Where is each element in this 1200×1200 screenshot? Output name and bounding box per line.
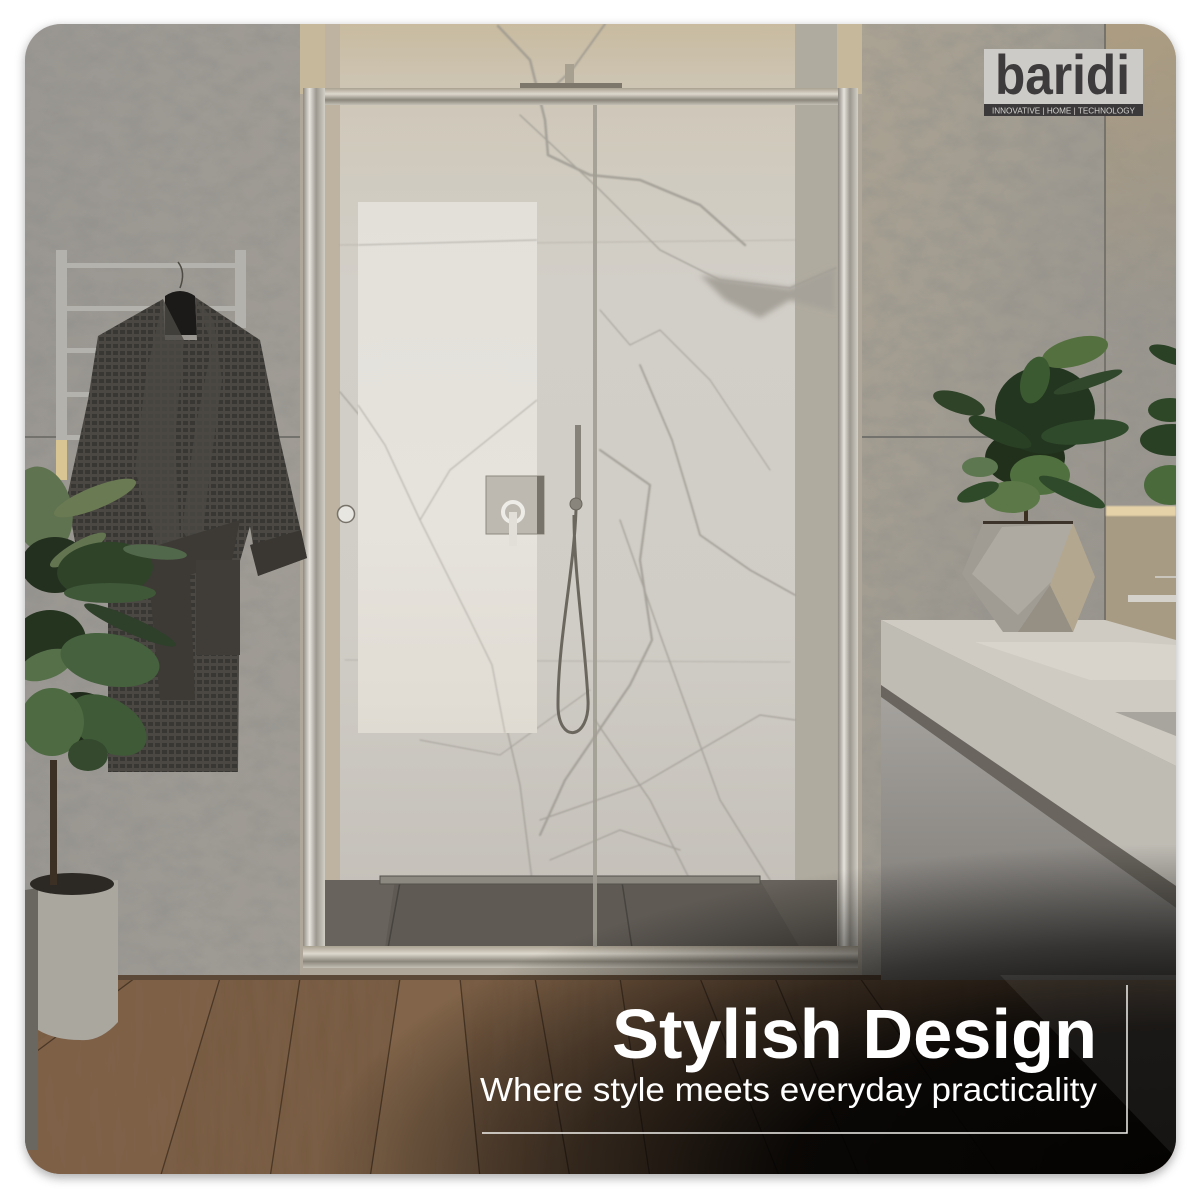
towel rail [56,250,246,480]
shower head [520,64,622,90]
vanity shadow groove [881,685,1176,908]
right plant [930,330,1130,525]
frosted glass reflection [358,202,537,733]
reflection strip at right mirror [1106,506,1176,640]
corner rule around caption [482,985,1127,1133]
wood floor [25,975,1176,1178]
mixer valve plate [486,476,544,534]
vanity cabinet [881,697,1176,980]
left plant [25,466,187,885]
dark gradient overlay [348,852,1176,1174]
subtitle: Where style meets everyday practicality [480,1071,1098,1108]
right plant reflection [1140,344,1176,505]
vanity counter [881,620,1176,886]
door knob [338,506,354,522]
frame: right jamb [838,88,858,968]
geometric planter [962,521,1095,632]
left planter [25,873,118,1150]
door centre stile [593,105,597,947]
frosted panel veins [358,240,537,733]
frame: left jamb [303,88,325,968]
hand shower and hose [558,425,588,733]
marble veins [340,24,836,880]
marble dark veining patch [701,274,832,320]
right concrete wall [860,24,1180,984]
bathrobe [67,262,307,772]
logo: baridi: baridi [995,43,1130,106]
frame: bottom rail [303,946,858,968]
linear floor drain [380,876,760,884]
heading: Stylish Design: Stylish Design [612,995,1097,1073]
shower niche [300,24,862,984]
corner glass glint [1000,975,1176,1158]
shower floor tray [325,880,837,948]
frame: top rail [303,88,858,105]
left concrete wall [25,24,301,984]
logo: baridi: INNOVATIVE | HOME | TECHNOLOGY [992,106,1136,116]
